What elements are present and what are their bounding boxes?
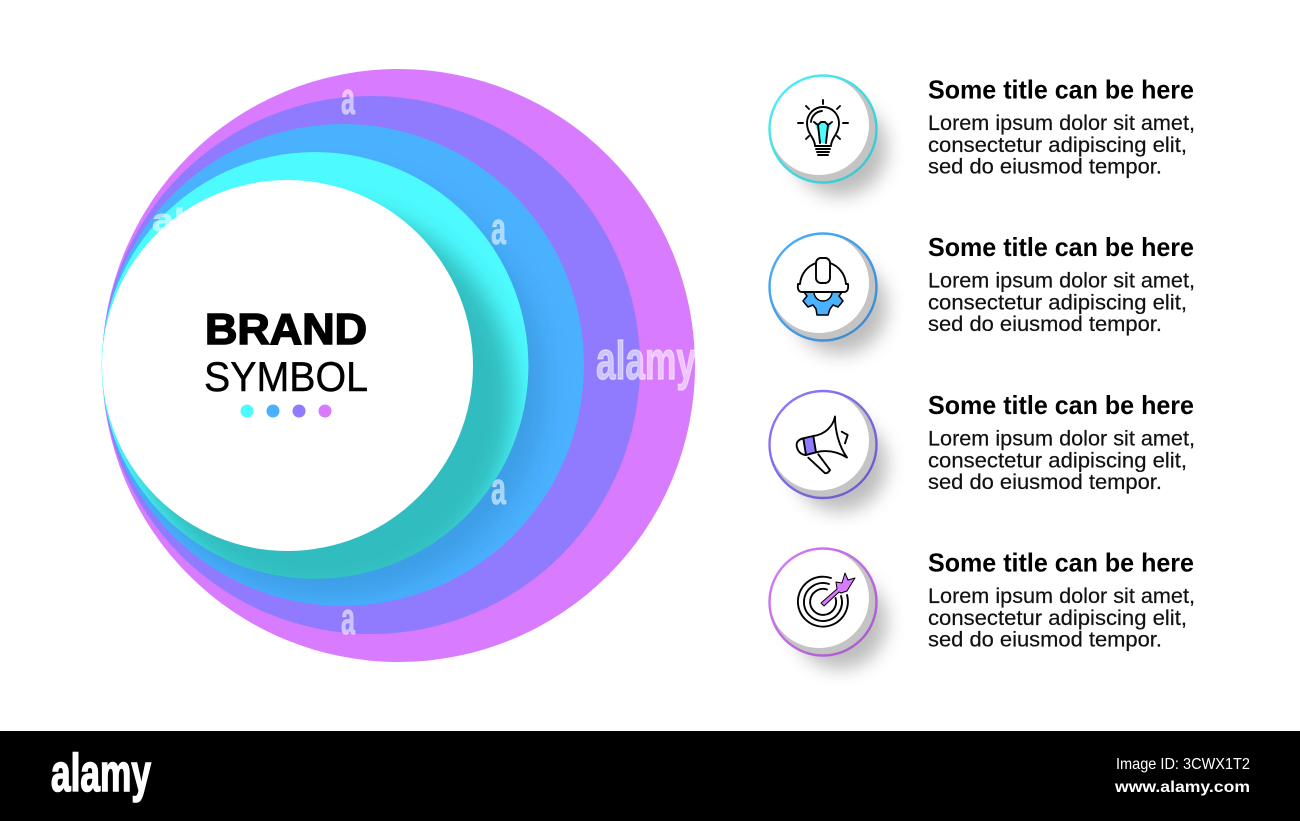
watermark fragments: a xyxy=(341,73,356,124)
text block 1: consectetur adipiscing elit, xyxy=(928,134,1187,157)
watermark fragments: alamy xyxy=(596,331,696,391)
panel: concentric circles diagram xyxy=(102,69,696,662)
icon: helmet and gear xyxy=(798,258,848,315)
text block 2: Lorem ipsum dolor sit amet, xyxy=(928,270,1195,293)
text block 4 xyxy=(928,548,1195,652)
circle layer: pink xyxy=(102,69,695,662)
brand heading: BRAND xyxy=(205,305,367,354)
footer url: www.alamy.com xyxy=(1114,779,1250,796)
footer bar xyxy=(0,731,1300,821)
badge: helmet and gear xyxy=(769,233,887,354)
text block 4: sed do eiusmod tempor. xyxy=(928,629,1162,652)
text block 3 xyxy=(928,390,1195,494)
text block 1: Some title can be here xyxy=(928,74,1194,104)
icon: target with arrow xyxy=(798,573,855,627)
brand heading: SYMBOL xyxy=(204,353,368,400)
circle layer: blue xyxy=(102,124,584,606)
circle layer: cyan with shadow xyxy=(102,152,528,595)
text block 1 xyxy=(928,74,1195,178)
badge: megaphone xyxy=(769,390,887,512)
watermark fragments: a xyxy=(491,203,507,254)
icon: light bulb xyxy=(798,100,848,155)
circle: white brand centre xyxy=(102,180,473,551)
text block 2: consectetur adipiscing elit, xyxy=(928,292,1187,314)
icon: megaphone xyxy=(797,416,848,473)
watermark fragments xyxy=(152,73,696,644)
text block 3: Lorem ipsum dolor sit amet, xyxy=(928,428,1195,450)
watermark fragments: a xyxy=(341,593,356,644)
watermark fragments: a xyxy=(491,463,507,514)
footer image id: Image ID: 3CWX1T2 xyxy=(1116,756,1250,773)
circle layer: purple xyxy=(102,96,640,634)
watermark fragments: al xyxy=(152,202,185,238)
brand heading xyxy=(204,305,368,400)
badge: target xyxy=(769,548,887,669)
footer logo: alamy xyxy=(51,744,151,803)
text block 1: Lorem ipsum dolor sit amet, xyxy=(928,112,1195,135)
text block 2: Some title can be here xyxy=(928,232,1194,262)
text block 3: sed do eiusmod tempor. xyxy=(928,471,1162,494)
text block 2 xyxy=(928,232,1195,336)
badge: light bulb xyxy=(769,75,887,196)
text block 3: consectetur adipiscing elit, xyxy=(928,449,1187,472)
text block 4: consectetur adipiscing elit, xyxy=(928,607,1187,630)
text block 4: Lorem ipsum dolor sit amet, xyxy=(928,585,1195,608)
text block 4: Some title can be here xyxy=(928,548,1194,578)
text block 1: sed do eiusmod tempor. xyxy=(928,156,1162,178)
text block 3: Some title can be here xyxy=(928,390,1194,420)
colour dots xyxy=(240,404,332,418)
text block 2: sed do eiusmod tempor. xyxy=(928,313,1162,336)
